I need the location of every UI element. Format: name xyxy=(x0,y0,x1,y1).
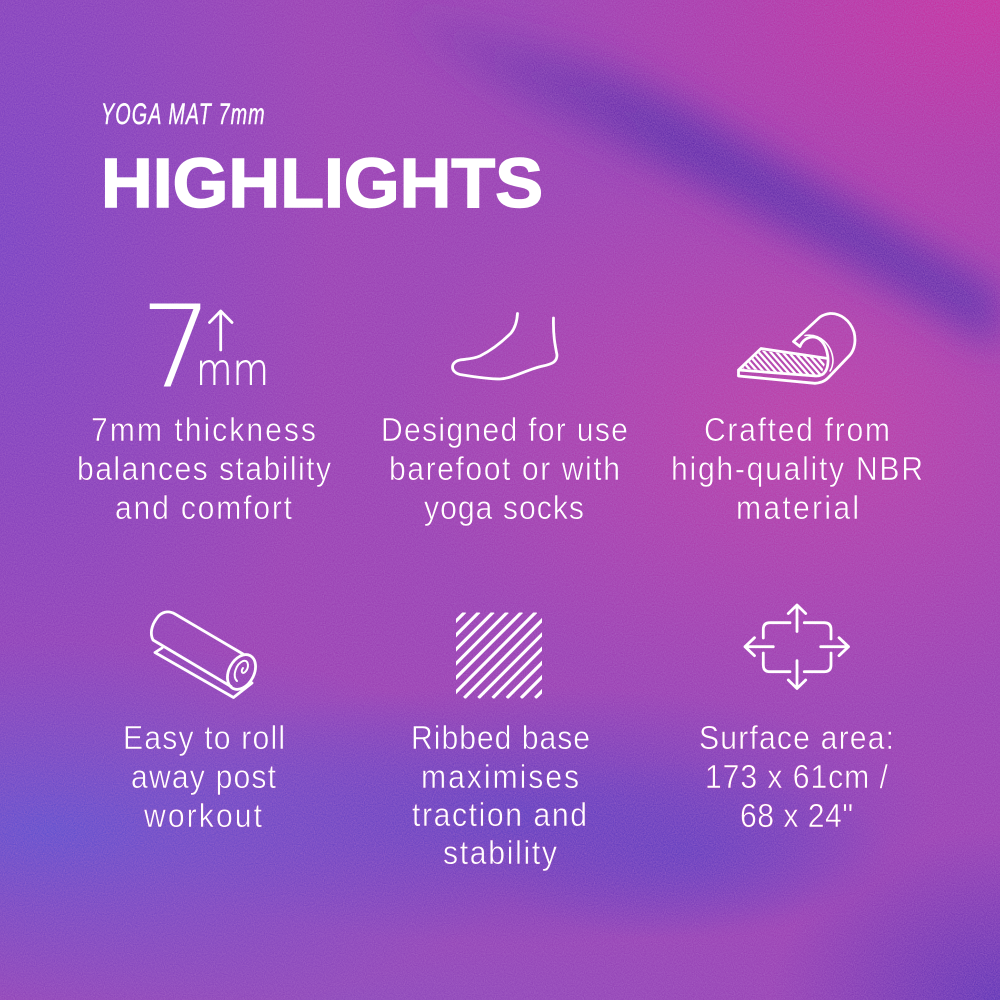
icon: mat section unrolling xyxy=(737,312,856,385)
text: ribbed base xyxy=(411,719,590,871)
infographic content xyxy=(78,103,922,871)
text: surface area: 68 x 24" xyxy=(740,797,853,834)
text: easy to roll: Easy to roll xyxy=(123,719,285,756)
text: easy to roll: away post xyxy=(131,758,276,795)
text: surface area: Surface area: xyxy=(699,719,894,756)
icon: 7mm with up arrow: 7 xyxy=(141,283,212,413)
text: barefoot: yoga socks xyxy=(424,489,584,526)
icon: 7mm with up arrow xyxy=(141,283,269,413)
text: NBR material: Crafted from xyxy=(704,411,890,448)
text: ribbed base: Ribbed base xyxy=(411,719,590,756)
title: HIGHLIGHTS xyxy=(101,144,543,222)
icon: foot xyxy=(452,314,557,379)
icon: rolled mat xyxy=(151,612,261,698)
icon: 7mm with up arrow: mm xyxy=(196,345,269,396)
text: NBR material xyxy=(671,411,923,526)
text: thickness: and comfort xyxy=(115,489,292,526)
feature: NBR material xyxy=(671,313,923,526)
icon: four-way expanding rectangle xyxy=(745,605,848,688)
text: thickness: balances stability xyxy=(77,450,331,487)
text: ribbed base: stability xyxy=(443,834,557,871)
text: easy to roll: workout xyxy=(143,797,262,834)
text: barefoot: Designed for use xyxy=(381,411,628,448)
text: thickness: 7mm thickness xyxy=(91,411,316,448)
feature: barefoot xyxy=(381,314,628,526)
text: barefoot: barefoot or with xyxy=(389,450,620,487)
feature: easy to roll xyxy=(123,612,285,834)
text: NBR material: high-quality NBR xyxy=(671,450,923,487)
text: easy to roll xyxy=(123,719,285,834)
icon: diagonal ribbed square xyxy=(456,612,542,698)
text: surface area: 173 x 61cm / xyxy=(705,758,888,795)
text: surface area xyxy=(699,719,894,834)
text: barefoot xyxy=(381,411,628,526)
text: NBR material: material xyxy=(736,489,859,526)
text: thickness xyxy=(77,411,331,526)
subtitle: YOGA MAT 7mm xyxy=(101,98,265,131)
feature: surface area xyxy=(699,605,894,834)
text: ribbed base: traction and xyxy=(412,796,587,833)
text: ribbed base: maximises xyxy=(421,758,579,795)
feature: ribbed base xyxy=(412,612,589,871)
feature: 7mm thickness xyxy=(77,283,331,526)
